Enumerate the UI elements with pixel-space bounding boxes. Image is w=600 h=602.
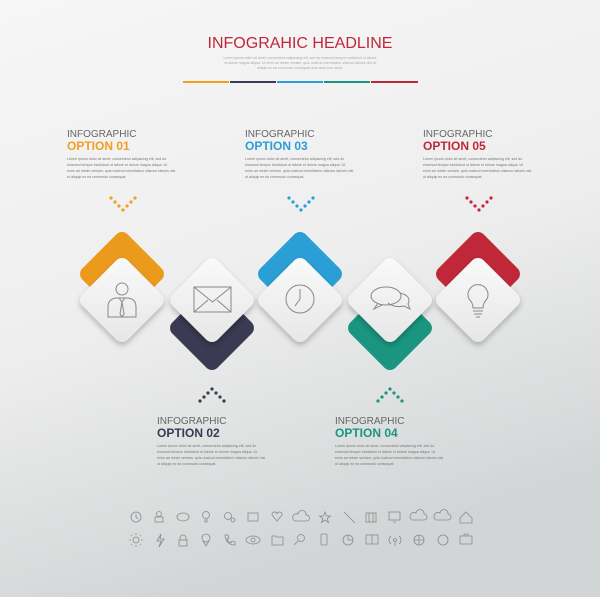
text: option 02: eiusmod tempor incididunt ut labore et dolore magna aliqua. Ut	[157, 450, 257, 454]
text: option 01	[67, 129, 175, 179]
icon: envelope	[194, 287, 231, 312]
text: option 04	[335, 416, 443, 466]
title: INFOGRAHIC HEADLINE	[208, 35, 392, 52]
text: option 03: OPTION 03	[245, 139, 308, 153]
white diamonds with icons	[77, 255, 523, 345]
text: option 05: Lorem ipsum dolor sit amet, consectetur adipiscing elit, sed do	[423, 157, 522, 161]
text: option 03: INFOGRAPHIC	[245, 129, 314, 140]
text: option 05	[423, 129, 531, 179]
text: option 03: Lorem ipsum dolor sit amet, consectetur adipiscing elit, sed do	[245, 157, 344, 161]
text: option 04: INFOGRAPHIC	[335, 416, 404, 427]
text: option 01: INFOGRAPHIC	[67, 129, 136, 140]
text: option 01: enim ad minim veniam, quis nostrud exercitation ullamco laboris nisi	[67, 169, 175, 173]
text: option 04: ut aliquip ex ea commodo consequat	[335, 462, 394, 466]
arrow: up navy	[198, 387, 226, 403]
text: option 03: enim ad minim veniam, quis nostrud exercitation ullamco laboris nisi	[245, 169, 353, 173]
text: option 04: eiusmod tempor incididunt ut labore et dolore magna aliqua. Ut	[335, 450, 435, 454]
text: option 01: ut aliquip ex ea commodo consequat	[67, 175, 126, 179]
arrow: down blue	[287, 196, 315, 212]
icon: person	[108, 283, 136, 317]
text: option 04: OPTION 04	[335, 426, 398, 440]
title	[208, 35, 392, 70]
text: option 03: eiusmod tempor incididunt ut labore et dolore magna aliqua. Ut	[245, 163, 345, 167]
text: option 04: enim ad minim veniam, quis nostrud exercitation ullamco laboris nisi	[335, 456, 443, 460]
text: option 05: enim ad minim veniam, quis nostrud exercitation ullamco laboris nisi	[423, 169, 531, 173]
text: option 02: INFOGRAPHIC	[157, 416, 226, 427]
color bar	[183, 81, 418, 83]
text: option 05: INFOGRAPHIC	[423, 129, 492, 140]
text: option 05: ut aliquip ex ea commodo consequat	[423, 175, 482, 179]
title: Lorem ipsum dolor sit amet, consectetur adipiscing elit, sed do eiusmod tempor incididunt ut labore	[223, 56, 377, 60]
text: option 02	[157, 416, 265, 466]
text: option 02: OPTION 02	[157, 426, 220, 440]
text: option 03: ut aliquip ex ea commodo consequat	[245, 175, 304, 179]
text: option 01: eiusmod tempor incididunt ut labore et dolore magna aliqua. Ut	[67, 163, 167, 167]
title: aliquip ex ea commodo consequat duis aute irure dolor.	[257, 66, 343, 70]
icon set	[129, 509, 472, 547]
text: option 01: Lorem ipsum dolor sit amet, consectetur adipiscing elit, sed do	[67, 157, 166, 161]
icon: bulb	[468, 285, 488, 317]
arrow: down red	[465, 196, 493, 212]
title: et dolore magna aliqua. Ut enim ad minim veniam, quis nostrud exercitation ullamco laboris nisi ut	[224, 61, 376, 65]
text: option 02: ut aliquip ex ea commodo consequat	[157, 462, 216, 466]
text: option 03	[245, 129, 353, 179]
text: option 02: Lorem ipsum dolor sit amet, consectetur adipiscing elit, sed do	[157, 444, 256, 448]
colored diamonds	[77, 229, 523, 373]
arrow: down orange	[109, 196, 137, 212]
text: option 02: enim ad minim veniam, quis nostrud exercitation ullamco laboris nisi	[157, 456, 265, 460]
text: option 04: Lorem ipsum dolor sit amet, consectetur adipiscing elit, sed do	[335, 444, 434, 448]
text: option 05: OPTION 05	[423, 139, 486, 153]
text: option 05: eiusmod tempor incididunt ut labore et dolore magna aliqua. Ut	[423, 163, 523, 167]
arrow: up teal	[376, 387, 404, 403]
icon: speech bubbles	[371, 287, 410, 309]
icon: clock	[286, 285, 314, 313]
text: option 01: OPTION 01	[67, 139, 130, 153]
